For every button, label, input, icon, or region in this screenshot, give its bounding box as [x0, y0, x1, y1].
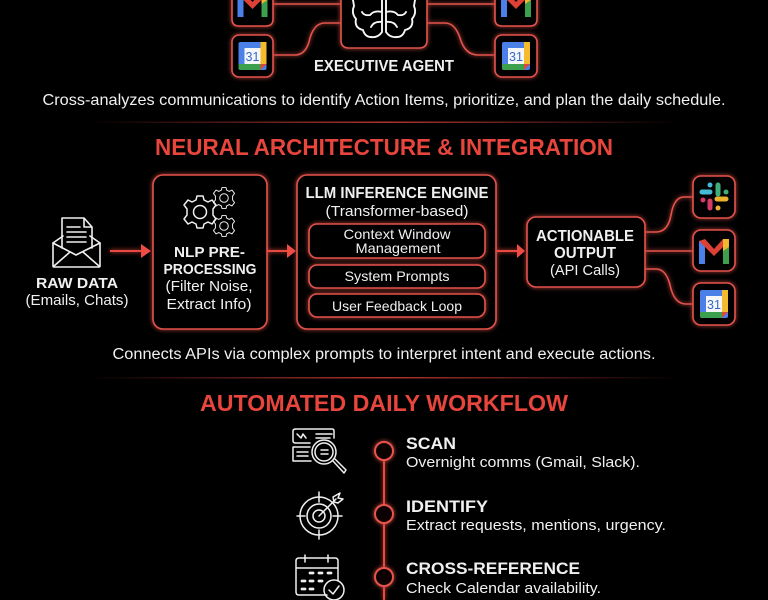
panel: actionable output [527, 217, 645, 287]
agent label: EXECUTIVE AGENT [314, 58, 455, 75]
icon: brain [341, 0, 427, 48]
timeline line [383, 460, 385, 600]
step: cross-reference [296, 555, 601, 600]
NLP subtitle: (Filter Noise, [166, 278, 252, 295]
connector lines [273, 4, 495, 55]
heading: automated daily workflow: AUTOMATED DAILY WORKFLOW [200, 390, 568, 416]
panel: actionable output: OUTPUT [554, 245, 617, 262]
icon: envelope [53, 218, 100, 267]
icon: gears [184, 187, 235, 237]
identify title: IDENTIFY [406, 497, 489, 516]
user feedback box: User Feedback Loop [332, 298, 462, 314]
system prompts box [309, 265, 485, 288]
arrow: LLM to output [496, 244, 525, 258]
scan title: SCAN [406, 434, 456, 453]
user feedback box [309, 294, 485, 317]
icon: target [297, 492, 343, 539]
raw data block [26, 218, 128, 309]
architecture description: Connects APIs via complex prompts to interpret intent and execute actions. [112, 346, 656, 363]
icon: calendar output [693, 283, 735, 325]
panel: NLP pre-processing: PROCESSING [164, 261, 256, 278]
panel: neural architecture flow [26, 175, 735, 329]
context window box [309, 224, 485, 258]
scan text: Overnight comms (Gmail, Slack). [406, 455, 640, 471]
arrow: raw data to NLP [110, 244, 151, 258]
NLP title: NLP PRE- [174, 244, 245, 261]
icon: calendar check [296, 555, 344, 600]
executive agent description: Cross-analyzes communications to identify Action Items, prioritize, and plan the daily schedule. [42, 92, 726, 109]
output subtitle: (API Calls) [550, 263, 620, 279]
scan node [375, 442, 393, 460]
panel: NLP pre-processing [153, 175, 267, 329]
context window box: Context Window [344, 226, 451, 242]
identify text: Extract requests, mentions, urgency. [406, 518, 666, 534]
icon: calendar left [232, 35, 273, 77]
cross-reference title: CROSS-REFERENCE [406, 559, 580, 578]
step: identify [297, 492, 666, 539]
identify node [375, 505, 393, 523]
heading: neural architecture: NEURAL ARCHITECTURE & INTEGRATION [155, 134, 613, 160]
icon: gmail output [693, 230, 735, 271]
step: scan [293, 429, 640, 473]
raw data label: RAW DATA [36, 276, 119, 292]
output title: ACTIONABLE [536, 228, 634, 245]
LLM title: LLM INFERENCE ENGINE [306, 185, 488, 202]
panel: NLP pre-processing: Extract Info) [166, 296, 252, 313]
icon: gmail left [232, 0, 273, 26]
LLM subtitle: (Transformer-based) [326, 204, 468, 220]
context window box: Management [356, 240, 441, 256]
icon: scan magnifier [293, 429, 346, 473]
connectors to apps [645, 197, 693, 304]
raw data subtitle: (Emails, Chats) [26, 293, 128, 309]
system prompts box: System Prompts [344, 268, 450, 284]
panel: workflow timeline [293, 429, 666, 600]
arrow: NLP to LLM [267, 244, 296, 258]
cross-reference node [375, 568, 393, 586]
executive agent diagram [232, 0, 537, 77]
cross-reference text: Check Calendar availability. [406, 581, 601, 597]
icon: slack [693, 176, 735, 218]
icon: calendar right [495, 35, 537, 77]
icon: gmail right [495, 0, 537, 26]
panel: LLM inference engine [297, 175, 496, 329]
